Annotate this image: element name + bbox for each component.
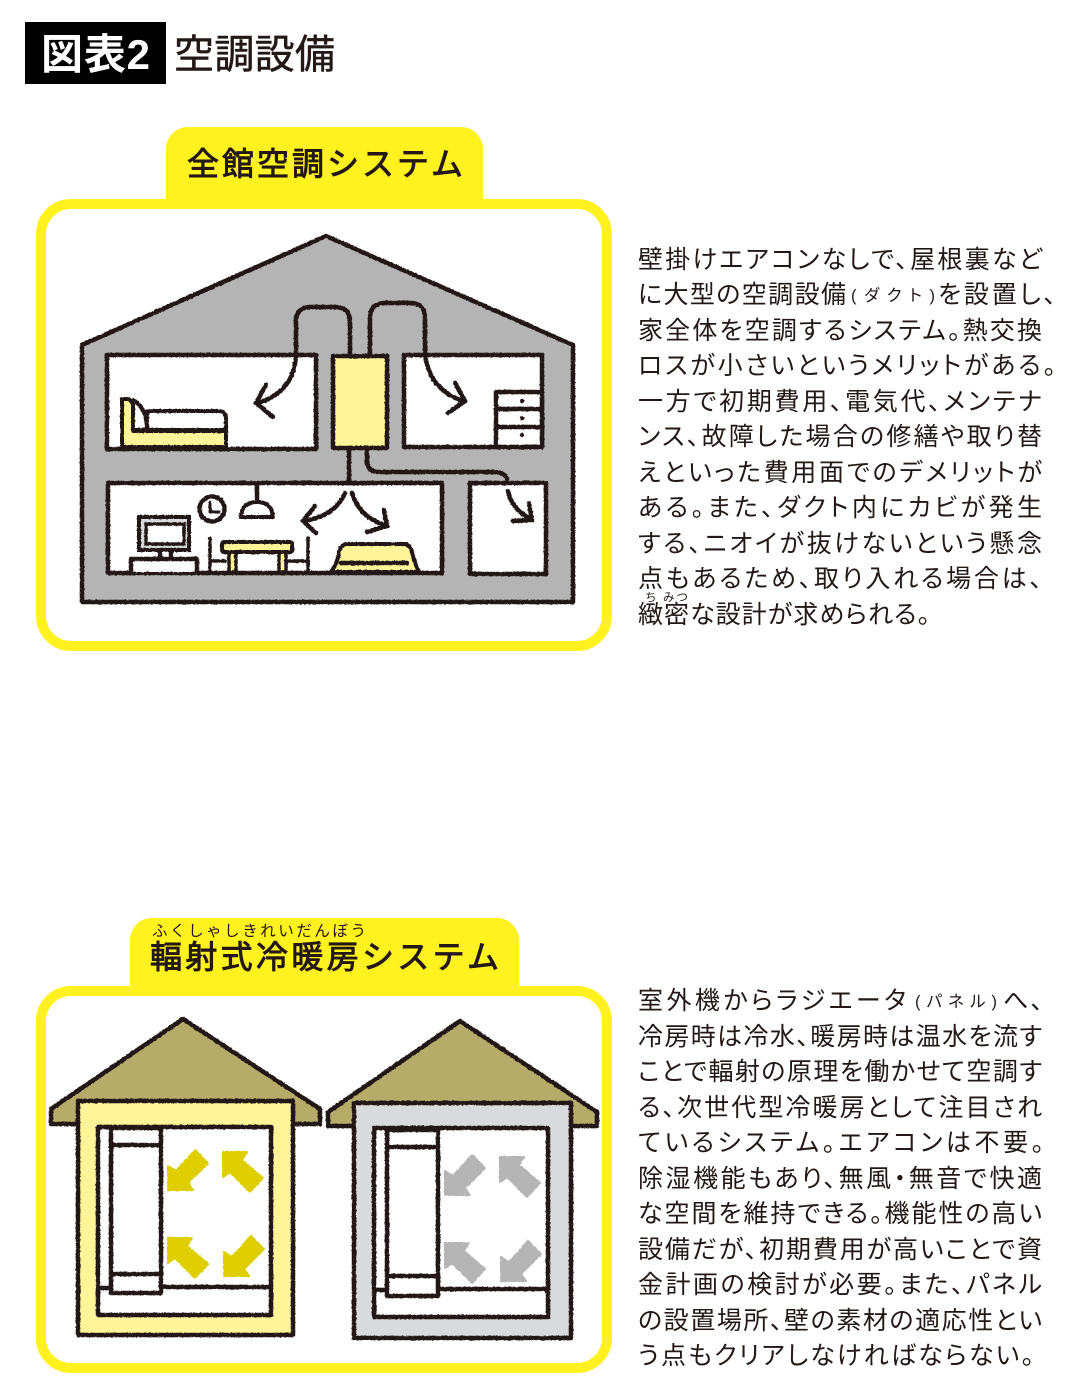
text block: 全館空調システム description: 点もあるため、取り入れる場合は、 [638, 565, 1042, 593]
heading text: 空調設備 [174, 33, 335, 77]
text block: 全館空調システム description: えといった費用面でのデメリットが [638, 459, 1042, 487]
television set [131, 517, 197, 572]
text block: 全館空調システム description [638, 246, 1056, 629]
ruby: ちみつ: ち [645, 591, 656, 604]
text block: 輻射式冷暖房システム description: ているシステム。エアコンは不要。 [638, 1129, 1044, 1157]
upper left bedroom [107, 355, 316, 449]
panel frame [41, 991, 607, 1368]
figure number badge: 図表2 [41, 31, 150, 78]
ruby: ちみつ: みつ [663, 591, 688, 604]
chest of drawers [496, 392, 542, 447]
text block: 全館空調システム description: ロスが小さいというメリットがある。 [638, 352, 1056, 380]
lower living room [108, 483, 442, 573]
house cross-section illustration [82, 236, 573, 602]
figure number badge [25, 22, 166, 84]
text block: 輻射式冷暖房システム description: な空間を維持できる。機能性の高い [638, 1200, 1042, 1228]
heading tab [130, 918, 519, 991]
text block: 全館空調システム description: する、ニオイが抜けないという懸念 [638, 530, 1042, 558]
title: 図表2 空調設備 [25, 22, 335, 84]
text block: 輻射式冷暖房システム description: 冷房時は冷水、暖房時は温水を流す [638, 1023, 1042, 1051]
radiator panel [387, 1130, 438, 1296]
walls [354, 1103, 571, 1338]
wall clock [200, 496, 224, 522]
text block: 輻射式冷暖房システム description: 設備だが、初期費用が高いことで資 [638, 1236, 1042, 1264]
panel: 輻射式冷暖房システム [41, 918, 607, 1368]
line with parenthetical ダクト: に大型の空調設備 [638, 281, 846, 309]
text block: 全館空調システム description: ンス、故障した場合の修繕や取り替 [638, 423, 1042, 451]
air conditioning unit [333, 356, 387, 448]
text block: 輻射式冷暖房システム description [638, 987, 1044, 1370]
line with parenthetical ダクト [638, 281, 1056, 309]
ruby: ふくしゃしきれいだんぼう: ふくしゃしきれいだんぼう [152, 922, 366, 940]
panel frame [41, 204, 607, 646]
roof [51, 1019, 320, 1124]
sofa [331, 544, 419, 572]
room [374, 1128, 548, 1317]
small right room [470, 483, 546, 574]
upper right room [404, 355, 542, 447]
text block: 輻射式冷暖房システム description: 除湿機能もあり、無風・無音で快適 [638, 1165, 1042, 1193]
text block: 輻射式冷暖房システム description: る、次世代型冷暖房として注目され [638, 1094, 1042, 1122]
line with parenthetical ダクト: を設置し、 [938, 281, 1056, 309]
walls [78, 1101, 293, 1335]
floor line [374, 1289, 548, 1290]
text block: 全館空調システム description: 壁掛けエアコンなしで、屋根裏など [638, 246, 1044, 274]
house: cool gray radiant panel [328, 1021, 597, 1338]
text block: 輻射式冷暖房システム description: の設置場所、壁の素材の適応性とい [638, 1307, 1042, 1335]
panel: 全館空調システム [41, 127, 607, 646]
text block: 全館空調システム description: 一方で初期費用、電気代、メンテナ [638, 388, 1042, 416]
line with parenthetical パネル [638, 987, 1043, 1015]
house: warm yellow radiant panel [51, 1019, 320, 1335]
text block: 輻射式冷暖房システム description: う点もクリアしなければならない。 [638, 1342, 1034, 1370]
pendant lamp [241, 485, 273, 517]
arrow: living room right [352, 493, 387, 532]
duct and arrow: upper left [256, 307, 350, 417]
room [98, 1127, 271, 1315]
dining table and chairs [210, 538, 308, 572]
ruby: ちみつ [645, 591, 688, 604]
duct to right room [367, 449, 507, 479]
floor line [98, 1287, 271, 1288]
cool arrows [445, 1155, 541, 1283]
text block: 全館空調システム description: ある。また、ダクト内にカビが発生 [638, 494, 1042, 522]
duct and arrow: upper right [370, 303, 465, 413]
duct down to living room [347, 449, 351, 483]
line with parenthetical パネル: へ、 [1003, 987, 1043, 1015]
heading tab [166, 127, 483, 204]
line with parenthetical パネル: 室外機からラジエータ [638, 987, 906, 1015]
text block: 輻射式冷暖房システム description: 金計画の検討が必要。また、パネル [638, 1271, 1042, 1299]
bed [122, 399, 226, 447]
arrow: living room left [303, 493, 345, 533]
arrow: right room [508, 491, 532, 521]
roof [328, 1021, 597, 1126]
radiator panel [111, 1128, 161, 1293]
line with parenthetical ダクト: (ダクト) [851, 286, 935, 305]
heat arrows [168, 1150, 264, 1278]
text block: 全館空調システム description: 家全体を空調するシステム。熱交換 [638, 317, 1042, 345]
text block: 輻射式冷暖房システム description: ことで輻射の原理を働かせて空調す [638, 1058, 1042, 1086]
text block: 全館空調システム description: 緻密な設計が求められる。 [638, 601, 930, 629]
house outline [82, 236, 573, 602]
heading tab: 全館空調システム [187, 146, 463, 182]
heading tab: 輻射式冷暖房システム [150, 939, 499, 975]
line with parenthetical パネル: (パネル) [915, 992, 997, 1011]
